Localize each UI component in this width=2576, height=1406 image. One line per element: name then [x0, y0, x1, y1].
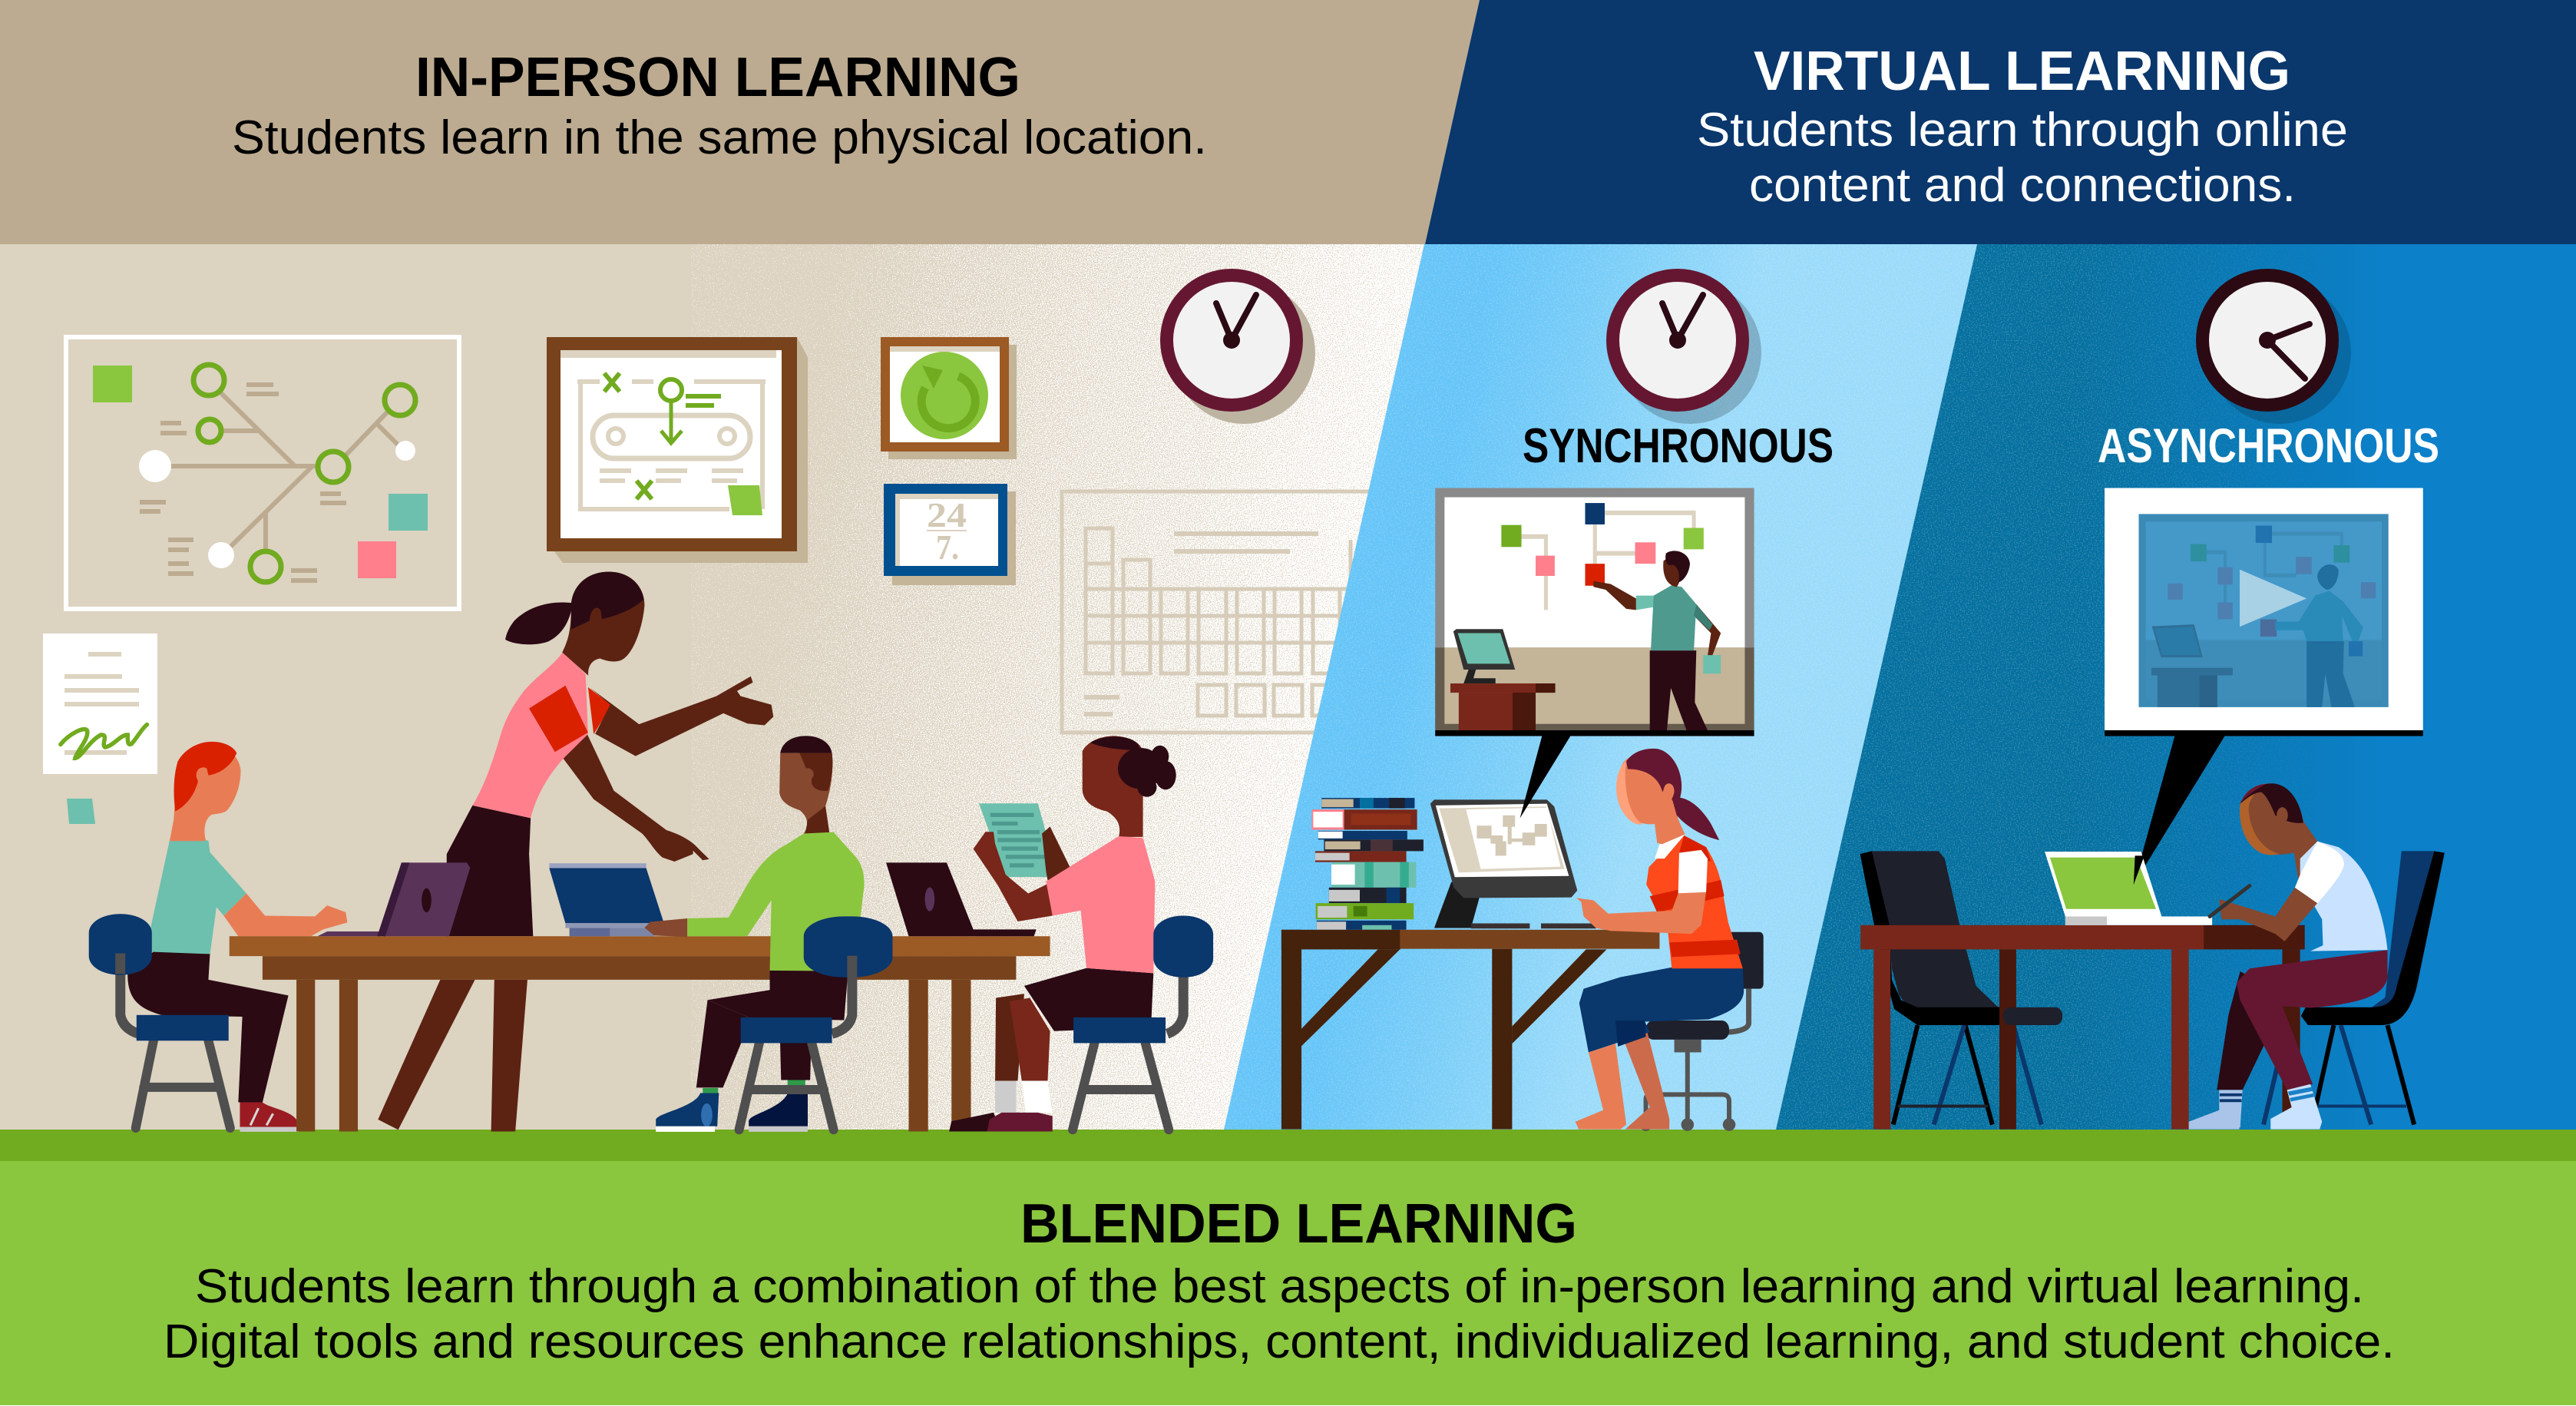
navy laptop	[549, 863, 664, 936]
red-haired student's chair	[89, 914, 230, 1128]
speech pointer	[2134, 736, 2225, 885]
blue chair	[2264, 851, 2445, 1125]
student at computer	[1576, 749, 1744, 1130]
back table legs	[1999, 949, 2300, 1130]
framed 24/7 sign: 24	[927, 495, 967, 534]
empty black chair	[1860, 851, 2042, 1125]
header: virtual learning: content and connections.	[1749, 159, 2296, 212]
in-person classroom scene	[89, 652, 1213, 1132]
framed process chart	[547, 337, 808, 563]
video call screen	[1435, 488, 1754, 736]
header: in-person learning	[0, 0, 1480, 244]
signed document	[43, 634, 157, 774]
table	[230, 936, 1050, 1131]
purple laptop	[317, 862, 470, 936]
red-haired student	[127, 742, 347, 1132]
header: in-person learning: Students learn in the same physical location.	[232, 111, 1207, 164]
wall speckle texture	[691, 244, 1459, 1131]
blue texture	[1225, 244, 2283, 1130]
green student's chair	[739, 916, 892, 1130]
framed green restart icon	[881, 337, 1017, 459]
blended learning panel: BLENDED LEARNING	[1020, 1193, 1577, 1255]
black laptop	[886, 862, 1037, 936]
synchronous zone background	[1224, 244, 1977, 1130]
label: asynchronous: ASYNCHRONOUS	[2098, 419, 2439, 473]
label: synchronous: SYNCHRONOUS	[1523, 419, 1834, 473]
asynchronous scene	[1860, 488, 2445, 1130]
framed 24/7 sign: 7.	[936, 528, 959, 567]
student in pink shirt	[949, 736, 1176, 1131]
header: virtual learning: VIRTUAL LEARNING	[1754, 41, 2290, 102]
header: in-person learning: IN-PERSON LEARNING	[415, 47, 1020, 108]
clock: synchronous	[1612, 275, 1761, 424]
teacher	[378, 652, 709, 1131]
laptop	[2045, 852, 2212, 925]
chair seat front	[2003, 1007, 2062, 1025]
blended learning panel	[0, 1130, 2576, 1405]
asynchronous zone background	[1776, 244, 2576, 1130]
desk	[1281, 930, 1659, 1130]
office chair	[1639, 932, 1764, 1131]
framed 24/7 sign	[884, 484, 1016, 585]
blended learning panel: Students learn through a combination of the best aspects of in-person learning and virtual learning.	[195, 1260, 2364, 1313]
book stack	[1311, 798, 1424, 930]
wall map diagram	[66, 337, 459, 609]
video screen	[2105, 488, 2423, 736]
clock: in-person	[1167, 275, 1315, 424]
sticky note	[67, 799, 95, 824]
header: virtual learning: Students learn through online	[1697, 104, 2348, 157]
header: virtual learning	[1425, 0, 2576, 244]
synchronous scene	[1281, 488, 1764, 1131]
classroom wall background	[0, 244, 1459, 1131]
student in green shirt	[644, 736, 865, 1132]
blended learning panel: Digital tools and resources enhance relationships, content, individualized learning, and student choice.	[164, 1315, 2395, 1368]
pink student's chair	[1073, 915, 1213, 1130]
desk	[1860, 925, 2305, 1130]
teacher's head and pointing arm	[505, 572, 773, 756]
speech pointer	[1520, 736, 1570, 818]
clock: asynchronous	[2202, 275, 2351, 424]
student writing	[2189, 783, 2387, 1130]
periodic table poster	[1062, 491, 1430, 733]
computer monitor	[1430, 799, 1596, 928]
